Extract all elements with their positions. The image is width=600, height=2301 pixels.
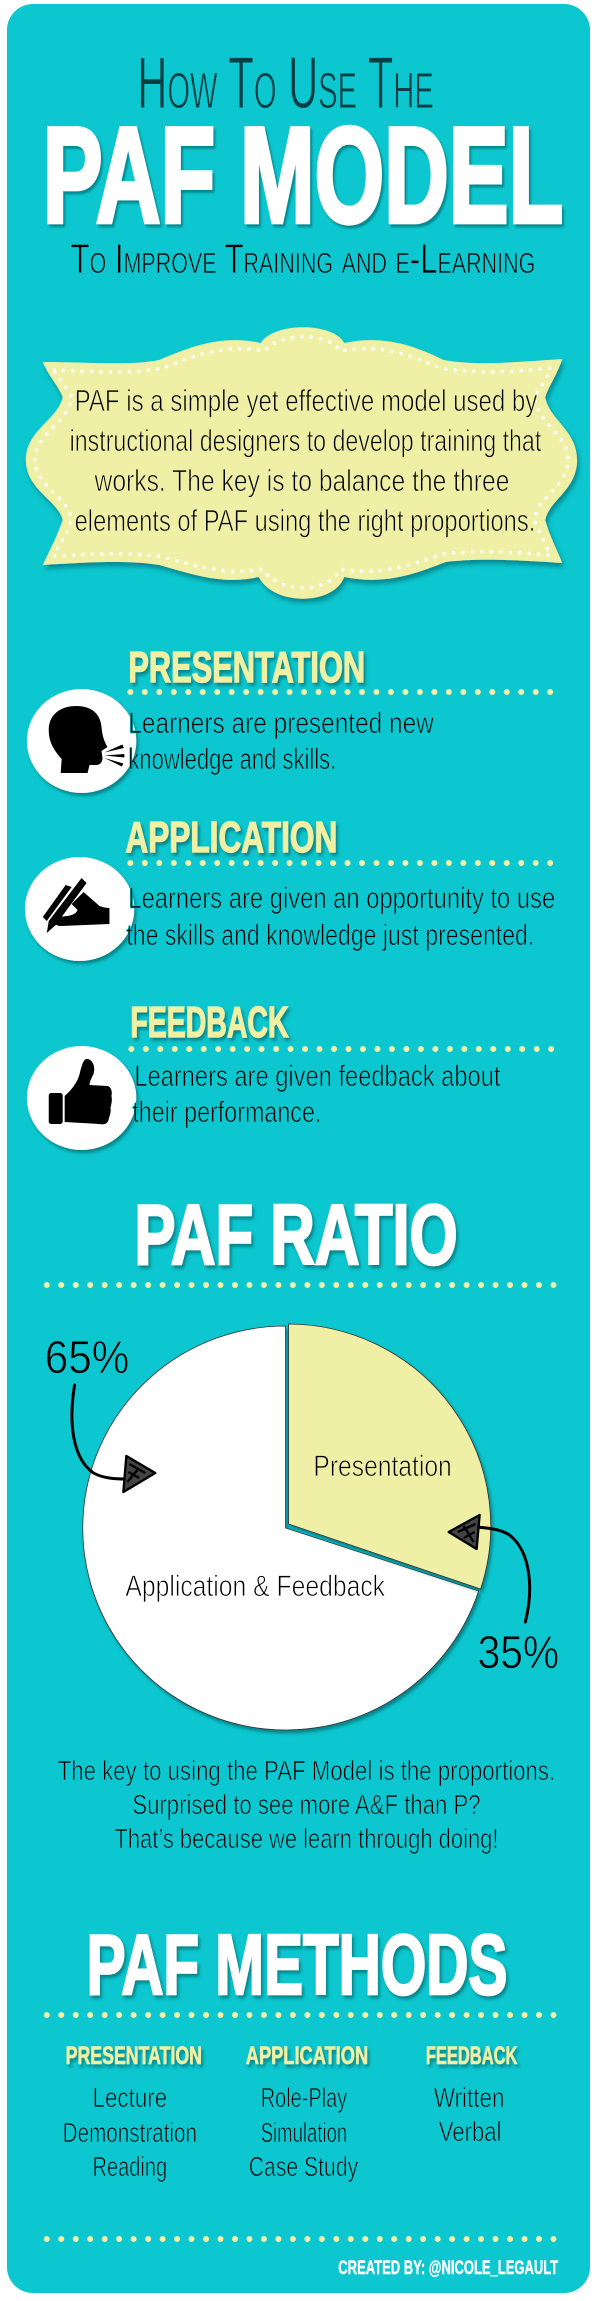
description: feedback [132,1060,501,1129]
label: presentation: Presentation [313,1450,452,1483]
column: application methods [246,2042,368,2182]
callout: 65% [45,1331,155,1492]
description: feedback: Learners are given feedback about [134,1060,501,1093]
column: presentation methods: PRESENTATION [66,2042,202,2070]
banner text: works. The key is to balance the three [94,463,509,498]
column: feedback methods: Verbal [439,2116,501,2147]
icon: thumbs up [27,1046,136,1150]
description: presentation: knowledge and skills. [128,743,336,776]
arrow: to application slice [72,1385,155,1492]
callout: 35%: 35% [478,1626,559,1678]
label: application and feedback: Application & Feedback [125,1570,385,1603]
icon: speaking head [27,689,136,793]
text block: key to proportions: Surprised to see more A&F than P? [132,1789,481,1820]
pie slice: application and feedback [83,1326,479,1730]
column: presentation methods: Demonstration [63,2117,197,2148]
description: presentation [128,707,434,776]
description: presentation: Learners are presented new [128,707,434,740]
column: application methods: APPLICATION [246,2042,368,2070]
column: presentation methods: Lecture [93,2082,167,2113]
pie slice: presentation [289,1324,491,1589]
description: feedback: their performance. [132,1096,321,1129]
panel: intro banner [26,327,577,599]
section: feedback [27,998,553,1150]
title block [43,43,563,282]
heading: application: APPLICATION [125,813,337,862]
heading: presentation: PRESENTATION [128,643,365,692]
heading: PAF RATIO: PAF RATIO [134,1187,458,1282]
banner dotted border [35,337,568,588]
banner shape [26,327,577,599]
section: presentation [27,643,551,793]
column: presentation methods: Reading [93,2151,167,2182]
banner text [70,383,542,538]
column: feedback methods: FEEDBACK [426,2042,517,2070]
callout: 65%: 65% [45,1331,129,1383]
text block: key to proportions: That’s because we learn through doing! [114,1823,498,1854]
callout: 35% [449,1515,559,1678]
column: presentation methods [63,2042,202,2182]
section: application [25,813,555,961]
column: application methods: Role-Play [261,2082,347,2113]
column: feedback methods: Written [434,2082,504,2113]
column: application methods: Simulation [261,2117,347,2148]
icon: hand writing [25,857,134,961]
description: application [126,882,555,952]
column: application methods: Case Study [249,2151,358,2182]
heading: feedback: FEEDBACK [130,998,289,1047]
text block: key to proportions [58,1755,555,1854]
arrow: to presentation slice [449,1515,530,1622]
pie chart [83,1324,491,1730]
column: feedback methods [426,2042,517,2147]
